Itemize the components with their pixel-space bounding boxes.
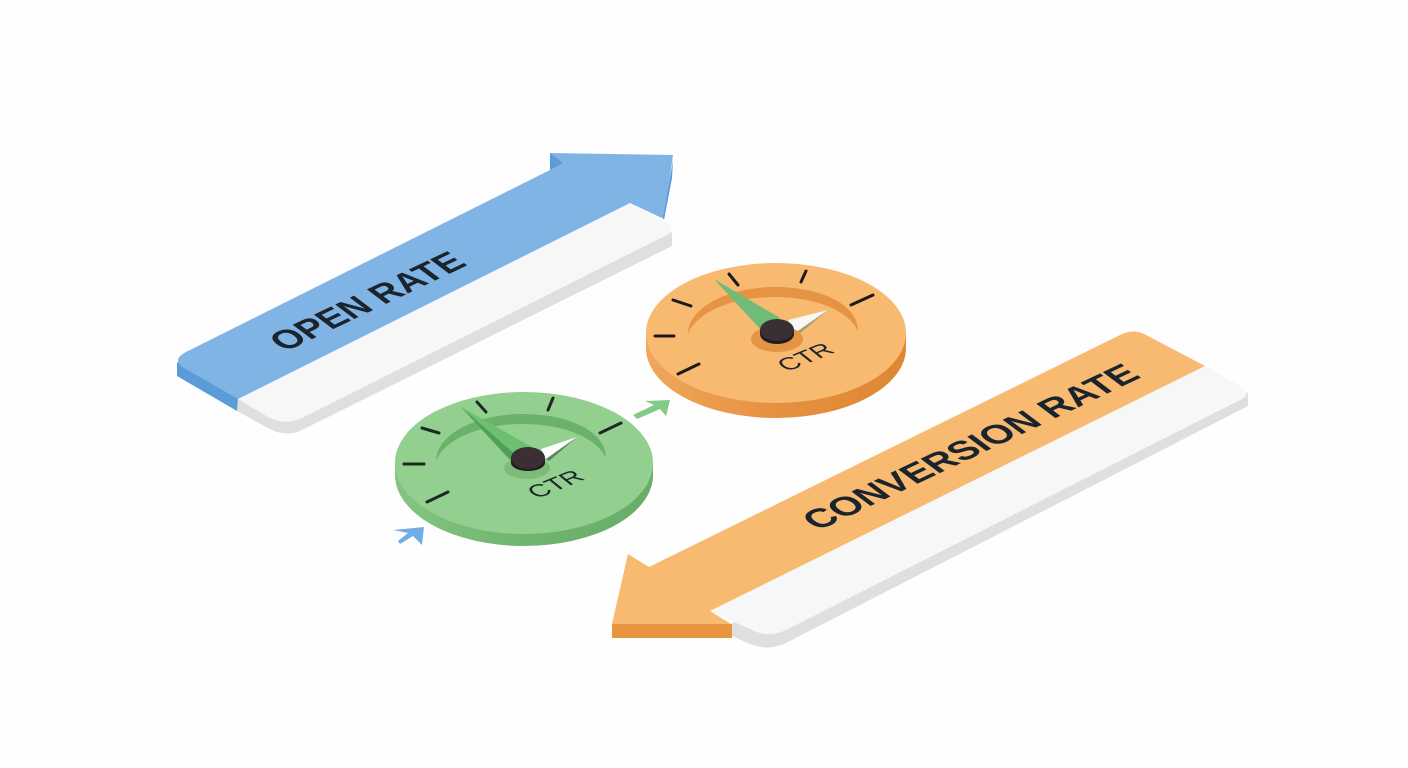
white band face xyxy=(710,366,1246,634)
arrowhead edge shade xyxy=(663,160,673,220)
green needle xyxy=(714,279,780,331)
orange arrow face xyxy=(612,332,1205,624)
conversion rate arrow xyxy=(612,332,1248,648)
white band side xyxy=(237,232,672,434)
tick marks xyxy=(655,271,873,374)
white needle xyxy=(788,310,828,335)
white band side xyxy=(730,392,1248,648)
open rate arrow xyxy=(177,153,673,434)
label: open rate: OPEN RATE xyxy=(260,246,474,357)
gauge side xyxy=(646,333,906,418)
orange CTR gauge xyxy=(646,263,906,418)
white needle xyxy=(541,437,577,461)
recessed crescent xyxy=(436,414,606,460)
gauge side xyxy=(395,463,653,546)
hub xyxy=(504,447,550,479)
green CTR gauge xyxy=(395,392,653,546)
tick marks xyxy=(404,398,621,502)
blue end side xyxy=(177,362,238,411)
gauge face xyxy=(646,263,906,403)
gauge face xyxy=(395,392,653,534)
label: CTR: CTR xyxy=(770,339,840,375)
icon: small green arrow xyxy=(633,400,670,419)
arrowhead notch shade xyxy=(550,153,563,170)
label: CTR: CTR xyxy=(520,466,590,502)
white band face xyxy=(238,203,672,422)
orange head side xyxy=(612,624,732,638)
hub xyxy=(751,319,803,352)
green needle xyxy=(461,407,532,462)
recessed crescent xyxy=(688,287,858,333)
icon: small blue arrow xyxy=(393,527,424,545)
blue arrow face xyxy=(178,153,673,399)
label: conversion rate: CONVERSION RATE xyxy=(793,358,1148,536)
